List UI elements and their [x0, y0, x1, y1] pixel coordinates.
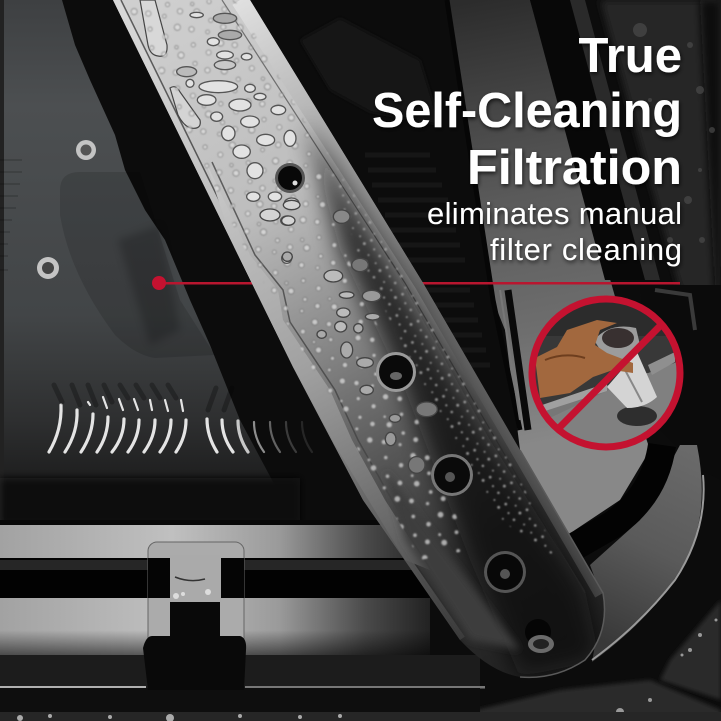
lower right wet surface: [660, 600, 721, 700]
clip window: [170, 555, 221, 602]
hand: [535, 320, 633, 398]
clip outline: [148, 542, 244, 650]
floor: [552, 362, 676, 444]
filter cylinder: [607, 352, 657, 408]
title: Self-Cleaning: [372, 84, 682, 138]
subtitle: eliminates manual: [427, 196, 682, 231]
wet droplets top right: [633, 23, 715, 243]
upper tub shape: [302, 20, 434, 122]
spray holes: [275, 163, 554, 653]
water pills: [140, 0, 167, 56]
right rim: [240, 0, 603, 593]
clip tab: [143, 602, 246, 690]
tub floor: [4, 0, 271, 480]
crescent bright rim: [592, 475, 704, 660]
no-hand icon: prohibition circle with filter photo: [530, 298, 682, 448]
large droplets upper arm: [177, 12, 299, 263]
floor dark bottom edge: [0, 478, 300, 525]
dark speckled channel: [305, 120, 600, 677]
subtitle: [427, 196, 682, 267]
top right gray strip: [447, 0, 650, 540]
top right dark channel: [530, 0, 610, 280]
slats reflections: [49, 385, 312, 452]
bottom band with clip: [0, 520, 721, 721]
floor recess: [60, 172, 215, 358]
speckle textures: [125, 0, 560, 560]
title: Filtration: [467, 141, 682, 195]
title: [372, 29, 682, 195]
title: True: [579, 29, 682, 83]
screws on floor: [37, 140, 96, 279]
arm tip rim: [520, 450, 605, 677]
subtitle: filter cleaning: [490, 232, 682, 267]
top right wet panel: [600, 0, 721, 290]
left rim: [113, 0, 460, 640]
floor ribs: [4, 159, 22, 271]
red callout line: [152, 276, 680, 290]
black curved band: [572, 445, 662, 548]
ribbed dark zone: [365, 155, 490, 365]
crescent panel lower right: [590, 445, 702, 662]
right dark zone beside icon: [677, 285, 720, 292]
large droplets mid arm: [260, 200, 437, 473]
water band: [205, 160, 430, 570]
spray arm: [113, 0, 605, 677]
